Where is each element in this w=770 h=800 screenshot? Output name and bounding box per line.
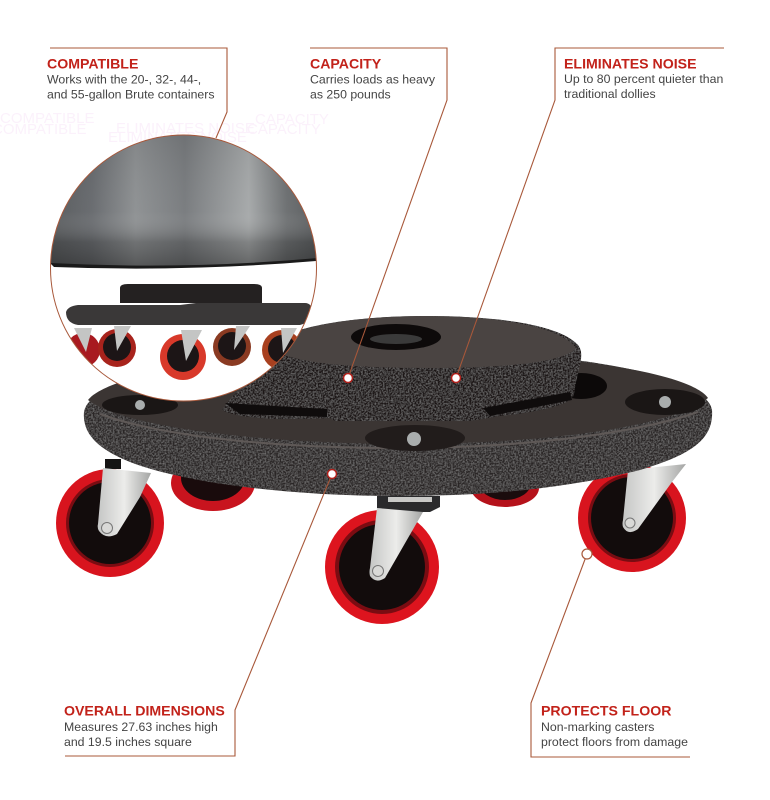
screw wells: [102, 389, 705, 451]
callout: overall dimensions: Measures 27.63 inches high: [64, 720, 218, 734]
callout: capacity: as 250 pounds: [310, 88, 391, 102]
callout: overall dimensions: OVERALL DIMENSIONS: [64, 702, 225, 718]
callout: protects floor: Non-marking casters: [541, 720, 654, 734]
callout: protects floor: protect floors from damage: [541, 735, 688, 749]
mini dolly body: [66, 284, 312, 325]
callout: eliminates noise: traditional dollies: [564, 87, 656, 101]
callout: protects floor: PROTECTS FLOOR: [541, 702, 671, 718]
ghost text artefacts: COMPATIBLE: [0, 110, 94, 127]
callout: compatible: and 55-gallon Brute containers: [47, 88, 214, 102]
callout: overall dimensions: [64, 474, 332, 756]
raised hub: [222, 316, 581, 421]
dolly base: [84, 350, 712, 496]
ghost text artefacts: CAPACITY: [255, 111, 329, 128]
callout: compatible: Works with the 20-, 32-, 44-,: [47, 72, 201, 86]
ghost text artefacts: [0, 110, 329, 146]
callout: eliminates noise: Up to 80 percent quieter than: [564, 72, 723, 86]
mini dolly wheels: [66, 326, 302, 380]
callout: capacity: [310, 48, 447, 378]
callout: eliminates noise: [456, 48, 724, 378]
callout: eliminates noise: ELIMINATES NOISE: [564, 56, 697, 72]
ghost text artefacts: CAPACITY: [247, 121, 321, 138]
container bottom: [51, 136, 316, 269]
callout: overall dimensions: and 19.5 inches square: [64, 735, 192, 749]
inset photo: dolly under container: [40, 130, 330, 401]
ghost text artefacts: ELIMINATES NOISE: [116, 120, 255, 137]
left wheel: [56, 459, 164, 577]
front wheel: [325, 496, 440, 624]
callout: capacity: Carries loads as heavy: [310, 72, 436, 86]
right wheel: [578, 464, 686, 572]
product photo: dolly: [56, 316, 712, 624]
right cut-out: [555, 373, 607, 399]
callout: capacity: CAPACITY: [310, 56, 382, 72]
callout: compatible: COMPATIBLE: [47, 56, 138, 72]
callout: protects floor: [531, 554, 690, 757]
ghost text artefacts: ELIMINATES NOISE: [108, 129, 247, 146]
back wheels: [171, 455, 539, 511]
callout dots: [328, 374, 592, 559]
callout: compatible: [47, 48, 227, 138]
